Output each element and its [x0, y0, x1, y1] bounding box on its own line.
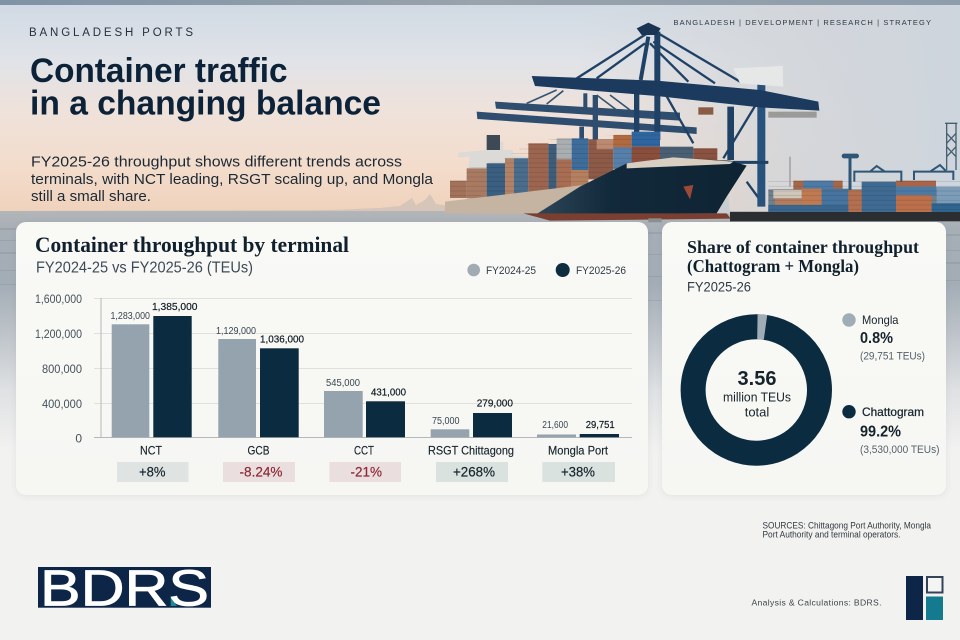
donut centre total: 3.56 — [738, 368, 776, 390]
header: organisation strapline: BANGLADESH | DEVELOPMENT | RESEARCH | STRATEGY — [674, 18, 931, 27]
panel subheading: FY2024-25 vs FY2025-26 (TEUs) — [36, 260, 253, 277]
legend: Mongla: (29,751 TEUs) — [860, 350, 925, 362]
sources note: SOURCES: Chittagong Port Authority, Mongla — [762, 520, 931, 530]
badge: Mongla — [542, 462, 615, 482]
yard containers — [730, 181, 960, 221]
chart legend — [467, 263, 626, 277]
badge: CCT — [329, 462, 401, 482]
FY2024-25 bars — [112, 324, 576, 437]
FY2025-26 value labels: 279,000 — [477, 398, 513, 410]
ship container stacks — [450, 132, 720, 198]
panel: share of container throughput — [662, 222, 946, 495]
chart legend: FY2024-25 — [486, 265, 536, 277]
FY2025-26 value labels: 1,036,000 — [260, 334, 304, 346]
badge: NCT — [117, 462, 188, 482]
donut chart — [693, 314, 820, 453]
terminal category labels: CCT — [354, 443, 375, 457]
sources note — [762, 520, 931, 540]
y axis labels: 1,200,000 — [35, 327, 82, 341]
intro text block: still a small share. — [31, 189, 151, 205]
terminal category labels: GCB — [248, 443, 270, 457]
terminal category labels: RSGT Chittagong — [428, 443, 514, 457]
FY2025-26 value labels: 1,385,000 — [152, 301, 198, 313]
legend: Chattogram: Chattogram — [862, 405, 924, 419]
FY2024-25 value labels: 1,129,000 — [216, 326, 256, 337]
badge: GCB: -8.24% — [240, 464, 282, 480]
title: Container traffic — [30, 52, 288, 90]
sources note: Port Authority and terminal operators. — [762, 530, 900, 540]
ship superstructure — [458, 142, 528, 197]
icon: BDRS brand mark — [906, 576, 943, 620]
FY2025-26 value labels — [152, 301, 615, 431]
water texture strips around the cards — [0, 228, 960, 301]
intro text block: terminals, with NCT leading, RSGT scaling up, and Mongla — [31, 172, 434, 188]
terminal category labels — [140, 443, 609, 457]
main crane — [577, 32, 768, 207]
legend: Mongla: 0.8% — [860, 330, 893, 347]
share panel heading: Share of container throughput — [687, 237, 919, 257]
FY2024-25 value labels: 1,283,000 — [110, 311, 150, 322]
donut centre total — [723, 368, 791, 420]
FY2025-26 value labels: 431,000 — [371, 387, 406, 399]
BDRS logo: BDRS — [40, 560, 209, 616]
y axis labels: 0 — [75, 432, 82, 446]
y axis labels: 1,600,000 — [35, 292, 82, 306]
hero photo: container ship and port cranes — [445, 23, 960, 222]
donut centre total: million TEUs — [723, 390, 791, 405]
FY2025-26 bars — [153, 316, 619, 437]
badge: RSGT — [436, 462, 508, 482]
panel: container throughput by terminal — [16, 222, 648, 495]
panel heading: Container throughput by terminal — [35, 232, 349, 257]
badge: NCT: +8% — [139, 464, 166, 480]
FY2024-25 value labels: 21,600 — [542, 420, 568, 431]
legend: Mongla: Mongla — [862, 313, 899, 327]
FY2025-26 value labels: 29,751 — [586, 419, 615, 431]
bar chart — [35, 292, 632, 457]
terminal category labels: Mongla Port — [548, 443, 609, 457]
legend: Chattogram — [842, 405, 940, 456]
y axis labels — [35, 292, 82, 446]
badge: GCB — [223, 462, 295, 482]
header: bangladesh ports eyebrow: BANGLADESH PORTS — [29, 27, 193, 39]
FY2024-25 value labels — [110, 311, 568, 431]
legend: Chattogram: 99.2% — [860, 424, 901, 441]
legend: Mongla — [842, 313, 925, 362]
badge: Mongla: +38% — [561, 464, 595, 480]
background crane booms — [477, 93, 697, 140]
terminal category labels: NCT — [140, 443, 163, 457]
intro text block — [31, 154, 434, 205]
y axis labels: 800,000 — [42, 362, 82, 376]
FY2024-25 value labels: 75,000 — [432, 416, 460, 427]
badge: RSGT: +268% — [453, 464, 495, 480]
badge: CCT: -21% — [350, 464, 382, 480]
share panel heading: (Chattogram + Mongla) — [687, 256, 859, 276]
chart legend: FY2025-26 — [576, 265, 626, 277]
share panel subheading: FY2025-26 — [687, 280, 751, 295]
share panel heading — [687, 237, 919, 276]
donut centre total: total — [745, 405, 769, 420]
title — [30, 52, 381, 122]
legend: Chattogram: (3,530,000 TEUs) — [860, 444, 940, 456]
FY2024-25 value labels: 545,000 — [326, 378, 360, 389]
ship hull — [445, 185, 583, 214]
intro text block: FY2025-26 throughput shows different trends across — [31, 154, 402, 170]
analysis credit: Analysis & Calculations: BDRS. — [752, 598, 882, 608]
title: in a changing balance — [30, 84, 381, 122]
change badges — [117, 462, 615, 482]
y axis labels: 400,000 — [42, 397, 82, 411]
distant yard cranes and lights — [790, 123, 957, 190]
